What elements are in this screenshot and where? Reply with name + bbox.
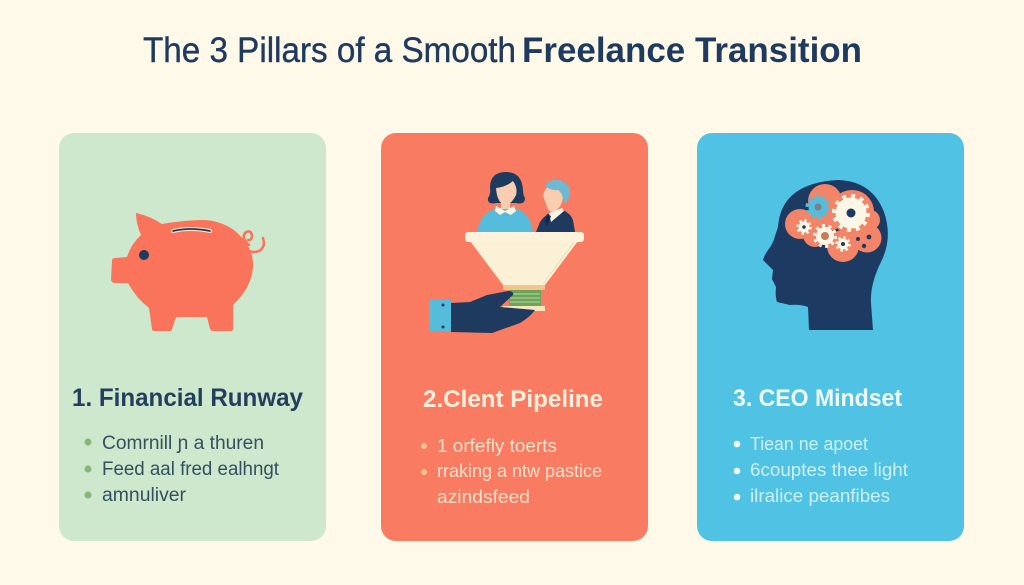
bullet list: client pipeline: 1 orfefly toerts bbox=[437, 435, 557, 456]
icon: piggy bank bbox=[111, 213, 264, 331]
bullet list: financial runway: amnuliver bbox=[102, 485, 187, 506]
heading: financial runway: 1. Financial Runway bbox=[72, 384, 303, 412]
gear center bbox=[814, 226, 836, 246]
icon: head with gears bbox=[763, 180, 888, 330]
bullet list: financial runway: Feed aal fred ealhngt bbox=[102, 459, 280, 480]
gear blue bbox=[807, 196, 829, 218]
funnel cone bbox=[470, 241, 578, 285]
gear large bbox=[834, 196, 868, 230]
heading: ceo mindset: 3. CEO Mindset bbox=[733, 385, 902, 412]
bullet list: ceo mindset bbox=[734, 433, 908, 506]
bullet list: ceo mindset: 6couptes thee light bbox=[750, 459, 908, 480]
icon: client funnel bbox=[429, 172, 584, 333]
gear small right bbox=[836, 238, 850, 250]
panel: client pipeline bbox=[381, 133, 648, 541]
hand bbox=[451, 291, 535, 333]
man client bbox=[536, 180, 575, 232]
cuff bbox=[429, 300, 451, 331]
gear small left bbox=[798, 220, 810, 234]
heading: client pipeline: 2.Clent Pipeline bbox=[423, 386, 603, 413]
title: Freelance Transition bbox=[522, 31, 862, 70]
bullet list: ceo mindset: ilralice peanfibes bbox=[750, 485, 890, 506]
bullet list: financial runway: Comrnill ɲ a thuren bbox=[102, 433, 264, 454]
title bbox=[143, 31, 862, 70]
bullet list: client pipeline: rraking a ntw pastice bbox=[437, 460, 602, 481]
bullet list: client pipeline: azindsfeed bbox=[437, 486, 530, 507]
bullet list: ceo mindset: Tiean ne apoet bbox=[750, 433, 868, 454]
panel: financial runway bbox=[59, 133, 326, 541]
brain lobes bbox=[785, 184, 882, 262]
bullet list: client pipeline bbox=[421, 435, 602, 507]
head silhouette bbox=[763, 180, 888, 330]
money stack bbox=[503, 285, 545, 311]
brain dots bbox=[856, 235, 871, 248]
title: The 3 Pillars of a Smooth bbox=[143, 31, 516, 70]
panel: ceo mindset bbox=[697, 133, 964, 541]
woman client bbox=[477, 172, 533, 232]
bullet list: financial runway bbox=[84, 433, 280, 506]
funnel rim bbox=[465, 232, 584, 242]
